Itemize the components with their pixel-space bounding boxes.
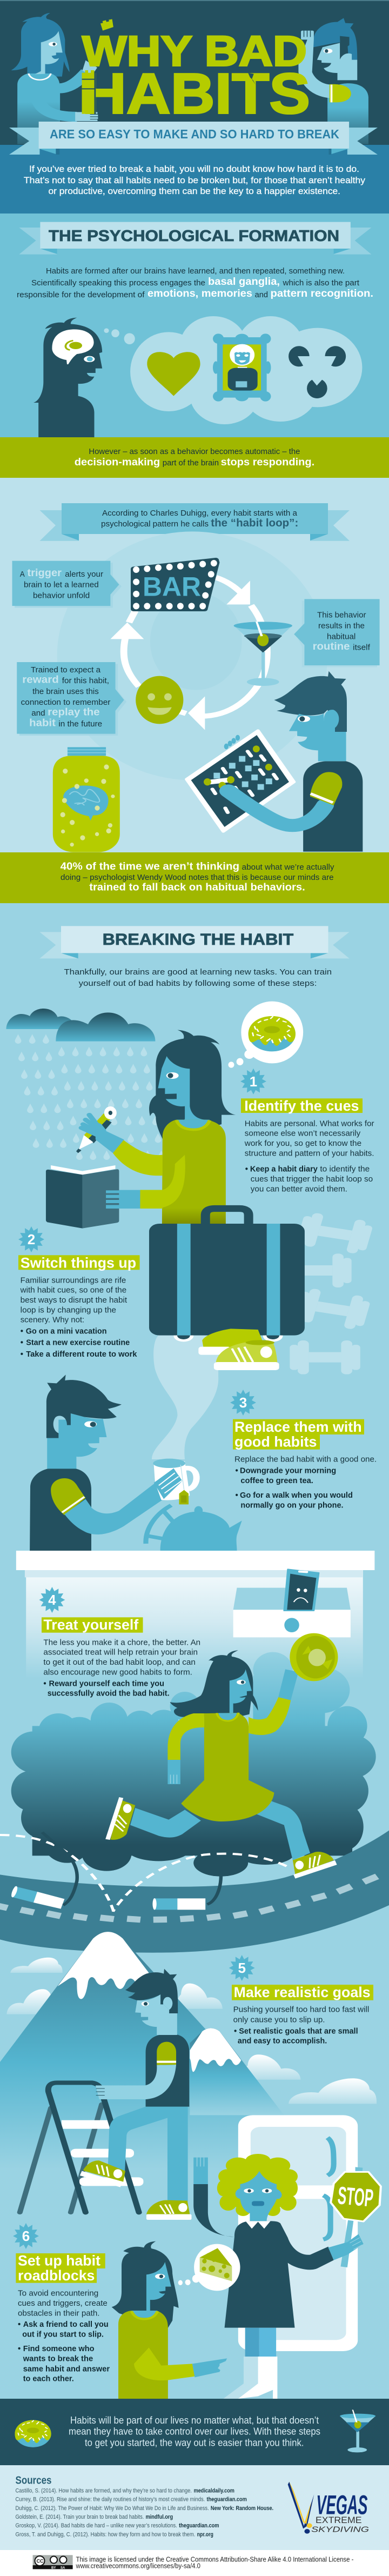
panel: sources: Duhigg, C. (2012). The Power of Habit: Why We Do What We Do in Life and Business.: [15, 2505, 209, 2512]
text: step 2 body: best ways to disrupt the habit: [21, 1296, 128, 1305]
text: reward callout: connection to remember: [21, 698, 111, 707]
arrow: loop ring: [110, 577, 267, 730]
badge: number 2: [18, 1226, 44, 1252]
icon: creative commons badge: CC: [37, 2559, 44, 2564]
panel: sources: Goldstein, E. (2014). Train your brain to break bad habits.: [15, 2514, 144, 2520]
text: step 6 body: To avoid encountering: [18, 2289, 98, 2298]
text: conclusion: [69, 2415, 320, 2448]
logo: Vegas Extreme Skydiving: SKYDIVING: [311, 2525, 369, 2534]
text: step 2 body: [20, 1276, 137, 1359]
path: dashed trails: [0, 1835, 286, 1912]
icon: woman pointing: [112, 2241, 227, 2399]
badge: number 3: 3: [239, 1394, 247, 1411]
text: step 3 body: •: [236, 1466, 238, 1476]
logo: Vegas Extreme Skydiving: EXTREME: [316, 2515, 362, 2525]
heading: breaking the habit: BREAKING THE HABIT: [103, 931, 293, 949]
title: HABITS: [82, 62, 310, 125]
text: decision-making band: [75, 448, 314, 468]
icon: mountains: [0, 1932, 284, 2169]
heading: set up habit roadblocks: Set up habit: [18, 2253, 100, 2269]
text: step 6 body: •: [18, 2320, 21, 2329]
icon: woman writing in diary: [113, 1030, 236, 1224]
text: 40 percent band: doing – psychologist Wendy Wood notes that this is because our minds are: [61, 873, 334, 882]
text: basal ganglia paragraph: basal ganglia,: [208, 276, 280, 288]
text: step 2 body: Familiar surroundings are rife: [21, 1276, 126, 1285]
badge: number 1: 1: [250, 1073, 257, 1090]
banner: subtitle ribbon: [9, 122, 378, 155]
text: step 3 body: Downgrade your morning: [240, 1466, 336, 1476]
text: step 3 body: [234, 1454, 377, 1510]
icon: fridge: [238, 2115, 358, 2351]
icon: smiley reward: [136, 676, 183, 724]
title: WHY BAD: [82, 27, 307, 75]
text: step 2 body: Go on a mini vacation: [26, 1327, 106, 1336]
heading: breaking the habit: [39, 926, 350, 958]
text: step 5 body: only cause you to slip up.: [233, 2016, 325, 2025]
icon: woman with stop sign: [193, 2154, 381, 2399]
text: decision-making band: However – as soon as a behavior becomes automatic – the: [89, 448, 300, 456]
badge: number 5: [229, 1955, 255, 1981]
icon: donut: [15, 2420, 51, 2447]
icon: steam: [152, 1335, 218, 1459]
text: step 3 body: Replace the bad habit with a good one.: [234, 1454, 377, 1464]
icon: man with tablet: [186, 671, 363, 852]
badge: number 6: [13, 2223, 39, 2249]
text: reward callout: the brain uses this: [32, 688, 99, 696]
text: step 2 body: •: [21, 1327, 23, 1336]
text: step 1 body: Keep a habit diary: [250, 1164, 318, 1173]
title: [82, 27, 310, 125]
text: step 1 body: work for you, so get to know the: [244, 1139, 361, 1148]
text: step 6 body: to each other.: [23, 2374, 74, 2384]
text: trigger callout: [20, 568, 103, 600]
icon: dumbbell lower: [290, 1340, 360, 1374]
text: step 2 body: Take a different route to work: [26, 1350, 137, 1359]
text: step 5 body: Set realistic goals that are small: [239, 2026, 358, 2036]
text: step 2 body: with habit cues, so one of the: [20, 1286, 126, 1295]
text: step 6 body: Find someone who: [23, 2344, 95, 2353]
heading: the psychological formation: [19, 222, 371, 255]
badge: number 4: [39, 1587, 65, 1613]
road: [0, 1831, 389, 1953]
illustration: step 4 scene: [0, 1633, 389, 1953]
text: basal ganglia paragraph: Habits are formed after our brains have learned, and then repeated, something new.: [46, 267, 345, 276]
panel: counter top and window: [16, 1551, 374, 1678]
panel: conclusion band: [15, 2410, 375, 2452]
icon: running woman: [105, 1650, 337, 1879]
chart: habit loop: [12, 531, 380, 852]
icon: framed portrait: [213, 333, 271, 402]
text: conclusion: mean they have to take control over our lives. With these steps: [69, 2426, 320, 2437]
icon: brain in a jar: [53, 747, 120, 852]
heading: switch things up: Switch things up: [21, 1255, 136, 1271]
text: step 5 body: •: [234, 2026, 237, 2036]
heading: treat yourself: Treat yourself: [43, 1617, 139, 1633]
badge: number 3: [230, 1390, 256, 1416]
panel: sources: theguardian.com: [179, 2522, 219, 2529]
text: step 2 body: Start a new exercise routine: [26, 1338, 130, 1347]
text: step 5 body: [233, 2005, 369, 2046]
text: trigger callout: alerts your: [65, 570, 103, 579]
text: routine callout: itself: [353, 643, 371, 652]
text: step 6 body: Ask a friend to call you: [23, 2320, 109, 2329]
icon: man with tea: [30, 1374, 183, 1551]
text: basal ganglia paragraph: [17, 267, 373, 299]
icon: creative commons badge: [33, 2555, 73, 2570]
illustration: step 5 scene: [0, 1932, 377, 2351]
text: bar sign label: BAR: [143, 572, 201, 602]
heading: set up habit roadblocks: roadblocks: [18, 2267, 95, 2284]
icon: martini glass: [234, 622, 292, 686]
badge: number 6: 6: [22, 2228, 30, 2244]
road markings: [0, 1877, 377, 1920]
icon: thought cloud: [104, 316, 362, 424]
text: routine callout: [313, 611, 371, 652]
text: step 2 body: scenery. Why not:: [21, 1316, 84, 1325]
panel: license footer: www.creativecommons.org/licenses/by-sa/4.0: [76, 2562, 200, 2570]
text: step 5 body: Pushing yourself too hard too fast will: [233, 2005, 369, 2014]
text: step 4 body: also encourage new good habits to form.: [43, 1667, 192, 1677]
text: reward callout: reward: [22, 675, 59, 685]
icon: pattern recognition shapes: [289, 346, 346, 398]
text: basal ganglia paragraph: pattern recognition.: [270, 288, 373, 299]
text: conclusion: Habits will be part of our lives no matter what, but that doesn’t: [70, 2415, 319, 2426]
panel: header illustration: [11, 13, 368, 144]
text: step 4 body: Reward yourself each time you: [49, 1679, 164, 1688]
text: step 1 body: someone else won’t necessarily: [245, 1129, 361, 1138]
text: routine callout: This behavior: [317, 611, 366, 619]
icon: donut thought bubble: [228, 1002, 303, 1068]
illustration: head and thought cloud: [33, 316, 362, 437]
icon: creative commons badge: SA: [61, 2566, 65, 2570]
illustration: step 3 scene: [16, 1374, 374, 1678]
icon: cheese thought bubble: [178, 2244, 240, 2291]
heading: replace them with good habits: Replace them with: [234, 1419, 362, 1435]
text: step 1 body: to identify the: [320, 1164, 370, 1173]
text: step 1 body: [244, 1119, 374, 1193]
text: routine callout: habitual: [327, 632, 356, 641]
callout: trigger shape: [12, 561, 122, 608]
text: 40 percent band: [61, 861, 334, 893]
text: decision-making band: part of the brain: [163, 459, 219, 468]
heading: replace them with good habits: good habits: [234, 1434, 317, 1450]
panel: sources: medicaldaily.com: [194, 2488, 234, 2494]
text: breaking the habit introduction: [64, 967, 332, 988]
text: reward callout: and: [31, 709, 45, 718]
heading: the psychological formation: THE PSYCHOLOGICAL FORMATION: [49, 228, 339, 245]
icon: block tower on the H: [82, 70, 256, 114]
text: step 6 body: wants to break the: [23, 2354, 93, 2363]
panel: license footer: This image is licensed under the Creative Commons Attribution-Share Alike 4.0 International License -: [76, 2555, 353, 2563]
illustration: step 6 scene: [112, 2154, 381, 2399]
text: step 4 body: The less you make it a chore, the better. An: [43, 1638, 200, 1647]
text: introduction: If you’ve ever tried to break a habit, you will no doubt know how hard it is to do.: [29, 164, 359, 174]
icon: pencil in hand: [76, 1106, 124, 1153]
icon: ladder: [20, 2083, 143, 2212]
panel: sources: theguardian.com: [206, 2497, 247, 2503]
text: 40 percent band: about what we’re actually: [242, 863, 334, 872]
icon: man grabbing the title: [298, 18, 368, 144]
icon: climbing man: [80, 1969, 192, 2220]
text: trigger callout: behavior unfold: [33, 592, 90, 600]
panel: license footer: [33, 2555, 353, 2570]
heading: make realistic goals: Make realistic goals: [234, 1984, 371, 2000]
panel: sources: Castillo, S. (2014). How habits are formed, and why they’re so hard to change.: [15, 2488, 192, 2494]
text: basal ganglia paragraph: and: [255, 291, 268, 299]
text: step 1 body: •: [245, 1164, 248, 1173]
panel: habit loop heading ribbon: psychological pattern he calls: [101, 520, 209, 529]
icon: mug with tea bag: [153, 1459, 197, 1504]
icon: bar sign: [133, 560, 217, 609]
icon: sad phone box: [233, 1569, 351, 1637]
panel: habit loop heading ribbon: [40, 503, 350, 541]
panel: sources: Groskop, V. (2014). Bad habits die hard – unlike new year’s resolutions.: [15, 2522, 177, 2529]
text: step 1 body: you can better avoid them.: [251, 1184, 347, 1193]
panel: habit loop heading ribbon: According to Charles Duhigg, every habit starts with a: [102, 509, 298, 518]
text: decision-making band: stops responding.: [221, 457, 314, 468]
icon: kettle: [146, 1505, 242, 1551]
text: introduction: [24, 164, 366, 196]
text: step 6 body: •: [18, 2344, 21, 2353]
text: step 2 body: loop is by changing up the: [21, 1305, 116, 1314]
panel: sources: New York: Random House.: [211, 2505, 273, 2512]
callout: routine shape: [294, 599, 380, 667]
icon: cigarette roots: [10, 1832, 221, 1910]
badge: number 4: 4: [48, 1592, 56, 1608]
text: step 4 body: to get it out of the bad habit loop, and can: [43, 1658, 196, 1667]
text: step 1 body: cues that trigger the habit loop so: [251, 1174, 373, 1184]
text: reward callout: Trained to expect a: [31, 666, 101, 675]
text: step 3 body: Go for a walk when you would: [240, 1491, 353, 1500]
text: step 2 body: •: [21, 1338, 23, 1347]
illustration: step 1 and 2 scene: [6, 1002, 374, 1459]
icon: clouds behind mountains: [6, 1958, 377, 2104]
text: step 1 body: Habits are personal. What works for: [245, 1119, 374, 1128]
panel: sources: [15, 2475, 273, 2538]
text: step 3 body: coffee to green tea.: [240, 1476, 313, 1485]
icon: falling lego block: [100, 19, 113, 31]
text: introduction: or productive, overcoming them can be the key to a happier existence.: [49, 186, 340, 196]
badge: number 5: 5: [238, 1960, 246, 1976]
text: trigger callout: A: [20, 570, 25, 579]
callout: reward shape: [17, 662, 126, 736]
text: basal ganglia paragraph: emotions, memories: [147, 288, 252, 299]
panel: sources: mindful.org: [146, 2514, 173, 2520]
text: reward callout: habit: [29, 718, 56, 729]
text: reward callout: for this habit,: [62, 677, 109, 685]
icon: rain clouds: [6, 1009, 164, 1160]
badge: number 2: 2: [28, 1231, 35, 1247]
text: breaking the habit introduction: yourself out of bad habits by following some of these steps:: [79, 979, 317, 988]
icon: suitcase: [149, 1209, 305, 1342]
text: step 4 body: •: [43, 1679, 46, 1688]
panel: sources: npr.org: [197, 2531, 213, 2538]
text: basal ganglia paragraph: which is also the part: [282, 279, 359, 288]
text: step 4 body: successfully avoid the bad habit.: [48, 1689, 170, 1698]
logo: Vegas Extreme Skydiving: [288, 2482, 369, 2534]
text: basal ganglia paragraph: Scientifically speaking this process engages the: [31, 279, 205, 288]
text: step 6 body: same habit and answer: [23, 2364, 110, 2373]
badge: number 1: [240, 1069, 266, 1095]
panel: sources: Sources: [15, 2475, 52, 2487]
text: step 4 body: associated treat will help retrain your brain: [43, 1648, 198, 1657]
text: step 2 body: •: [21, 1350, 23, 1359]
icon: heart: [147, 352, 200, 396]
text: step 4 body: [43, 1638, 200, 1698]
text: routine callout: results in the: [318, 622, 365, 630]
icon: silhouette with brain: [33, 318, 102, 437]
text: routine callout: routine: [313, 641, 350, 652]
icon: woman holding the tower: [11, 13, 98, 144]
icon: creative commons badge: BY: [51, 2566, 56, 2570]
text: reward callout: [21, 666, 111, 729]
text: step 1 body: structure and pattern of your habits.: [245, 1149, 374, 1158]
icon: diary book: [46, 1165, 163, 1229]
icon: candy coin: [290, 1633, 338, 1681]
text: step 3 body: normally go on your phone.: [240, 1500, 344, 1510]
text: step 6 body: cues and triggers, create: [18, 2299, 108, 2308]
heading: set up habit roadblocks: [16, 2253, 105, 2284]
text: step 5 body: and easy to accomplish.: [238, 2037, 327, 2046]
icon: dumbbells: [281, 1211, 374, 1331]
text: 40 percent band: 40% of the time we aren’t thinking: [61, 861, 239, 872]
text: reward callout: replay the: [48, 707, 100, 718]
text: conclusion: to get you started, the way out is easier than you think.: [85, 2437, 304, 2448]
banner: subtitle ribbon: ARE SO EASY TO MAKE AND SO HARD TO BREAK: [50, 127, 339, 141]
text: step 3 body: •: [236, 1491, 238, 1500]
text: trigger callout: brain to let a learned: [24, 581, 99, 590]
text: step 6 body: [18, 2289, 110, 2384]
text: breaking the habit introduction: Thankfully, our brains are good at learning new tasks. You can train: [64, 967, 332, 977]
panel: sources: Currey, B. (2013). Rise and shine: the daily routines of history’s most creative minds.: [15, 2497, 205, 2503]
text: 40 percent band: trained to fall back on habitual behaviors.: [89, 882, 305, 893]
text: introduction: That’s not to say that all habits need to be broken but, for those that aren’t healthy: [24, 175, 366, 185]
text: step 6 body: obstacles in their path.: [18, 2308, 99, 2318]
icon: big storm cloud: [11, 1652, 376, 1877]
text: decision-making band: decision-making: [75, 457, 160, 468]
panel: sources: Gross, T. and Duhigg, C. (2012). Habits: how they form and how to break them.: [15, 2531, 195, 2538]
text: reward callout: in the future: [58, 720, 102, 729]
panel: habit loop heading ribbon: the “habit loop”:: [211, 517, 298, 529]
heading: replace them with good habits: [233, 1419, 364, 1450]
text: step 6 body: out if you start to slip.: [22, 2330, 104, 2339]
text: trigger callout: trigger: [27, 568, 62, 579]
icon: sneakers: [198, 1329, 279, 1370]
heading: identify the cues: Identify the cues: [244, 1098, 359, 1114]
icon: martini: [340, 2410, 375, 2452]
text: basal ganglia paragraph: responsible for the development of: [17, 291, 145, 299]
